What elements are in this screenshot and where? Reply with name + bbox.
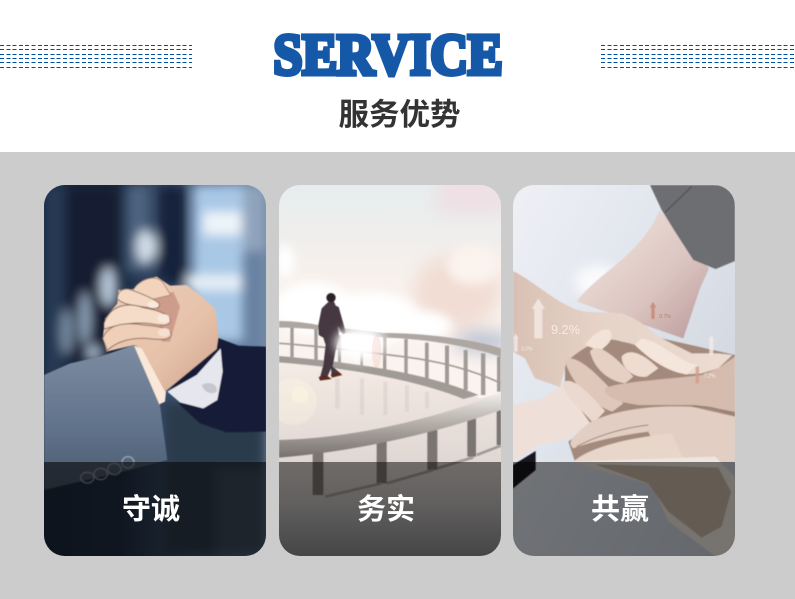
arrows — [513, 298, 714, 355]
label: 共赢 — [591, 494, 649, 526]
upper arm — [577, 210, 709, 338]
lower left arm — [513, 382, 605, 462]
white cuff — [167, 348, 223, 408]
decorative dashes left — [0, 45, 192, 68]
overlay — [279, 462, 501, 556]
label: 守诚 — [122, 494, 180, 526]
black cuff — [513, 451, 536, 488]
overlay — [44, 462, 266, 556]
front posts under outer rail — [313, 410, 501, 495]
fingers — [117, 289, 160, 309]
back rail posts — [290, 327, 501, 395]
label: 务实 — [357, 494, 415, 526]
inner curb — [279, 356, 478, 399]
reflections — [335, 378, 429, 415]
left arm and hand — [513, 271, 732, 387]
panel: 务实 — [279, 185, 501, 556]
background band — [0, 152, 795, 599]
photo: stacked hands: 9.2% — [551, 323, 580, 337]
subtitle: 服务优势 — [338, 98, 460, 132]
cuff and reflection under overlay — [573, 457, 735, 556]
cream cuff — [134, 346, 166, 404]
decorative dashes right — [601, 45, 794, 68]
lens flare — [270, 378, 317, 425]
panel: 共赢 — [513, 185, 735, 556]
photo: man on bridge — [279, 185, 501, 556]
outer rail — [279, 392, 501, 458]
grey sleeve — [650, 185, 735, 269]
photo: stacked hands: 9.7% — [659, 314, 671, 320]
hand shadow base — [565, 328, 735, 462]
panel: 守诚 — [44, 185, 266, 556]
glare — [335, 327, 385, 360]
photo: stacked hands: 3.2% — [521, 347, 533, 353]
thumb — [133, 278, 171, 299]
photo: handshake — [44, 185, 266, 556]
fingers — [585, 329, 611, 351]
floor — [279, 360, 501, 556]
right sleeve — [170, 337, 266, 432]
photo: stacked hands: 7.2% — [704, 373, 716, 379]
man — [318, 293, 346, 381]
photo: stacked hands — [513, 185, 735, 556]
overlay — [513, 462, 735, 556]
left sleeve — [44, 345, 167, 490]
hand back — [103, 277, 219, 392]
back rails — [279, 321, 501, 357]
